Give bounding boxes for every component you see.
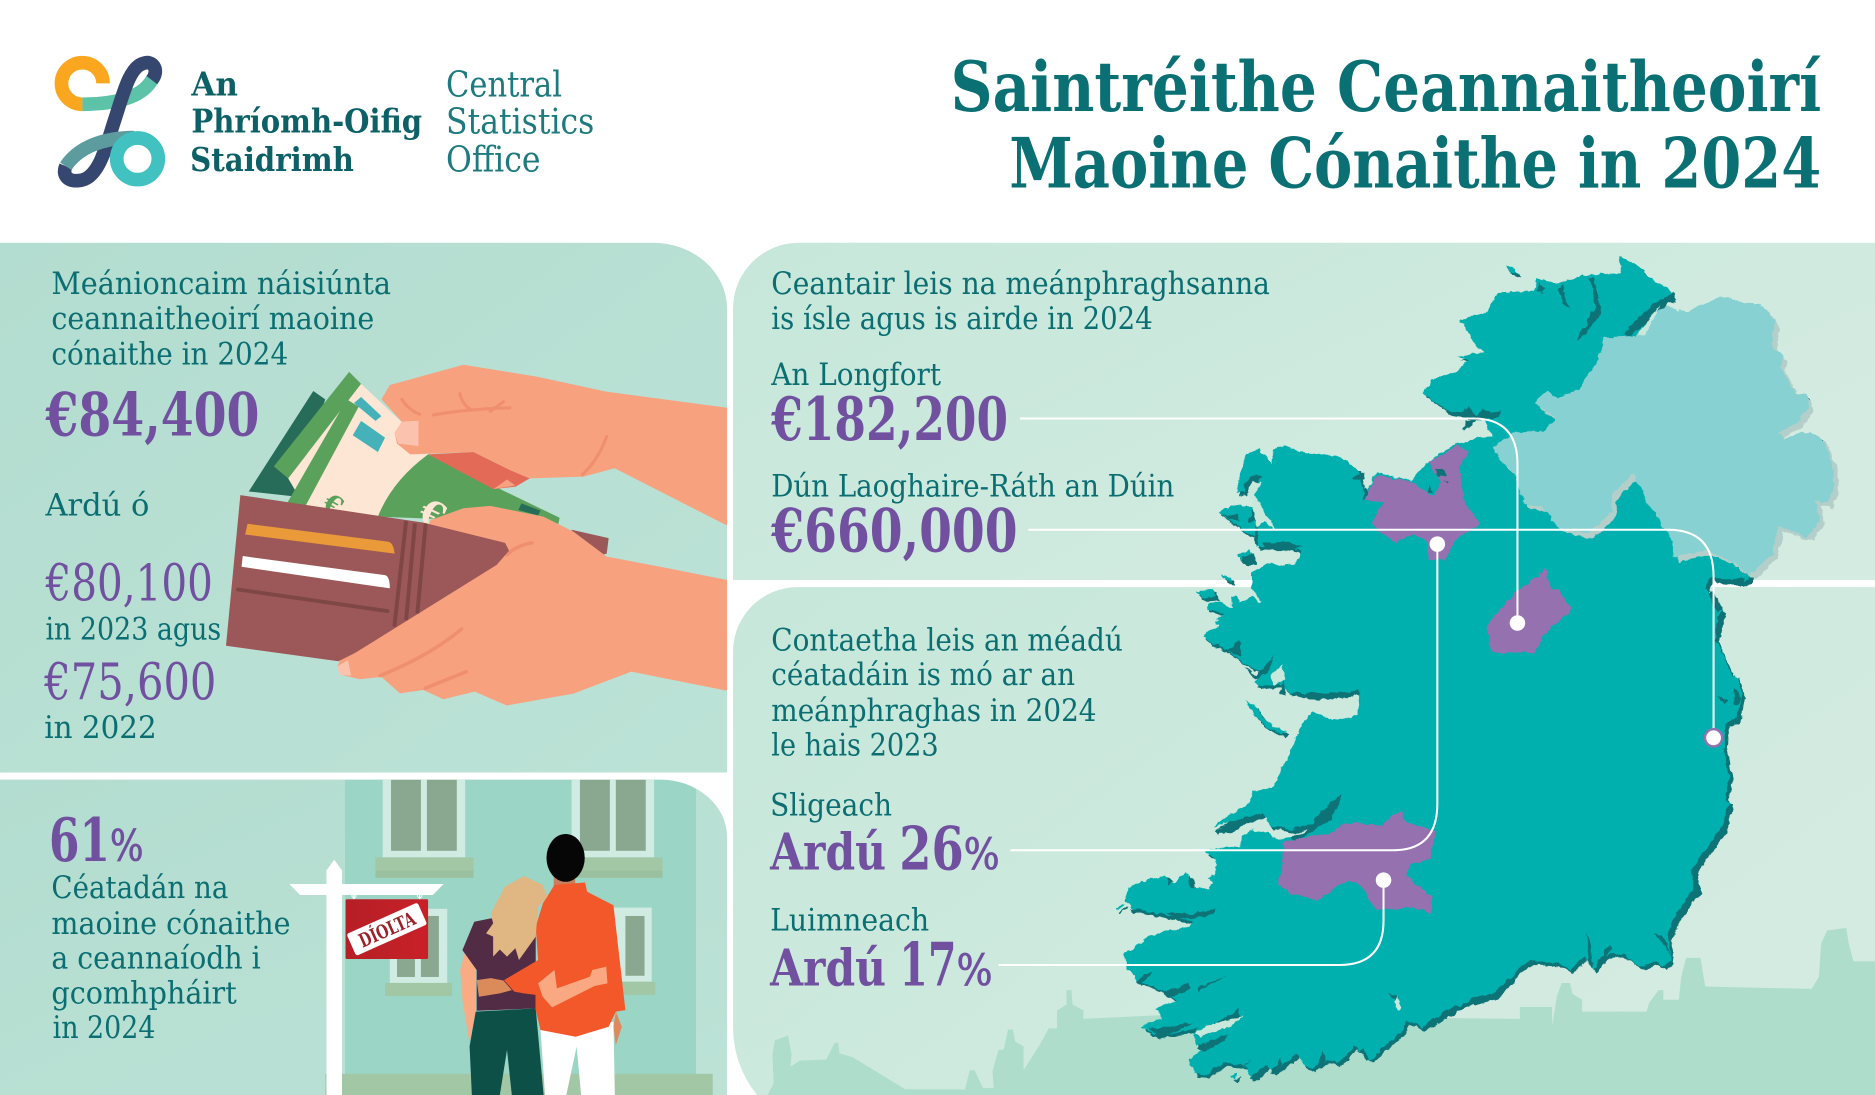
illustration: hands and wallet: € — [412, 490, 453, 539]
text: lowest and highest areas: €660,000 — [770, 496, 1018, 566]
logo text English: Office — [446, 140, 540, 181]
text: lowest and highest areas: Dún Laoghaire-Ráth an Dúin — [771, 468, 1174, 504]
text: largest percentage increases: Ardú — [769, 822, 886, 881]
logo — [61, 63, 158, 181]
text: lowest and highest areas: €182,200 — [771, 385, 1008, 455]
connector: Limerick — [998, 880, 1384, 965]
text: national income: €84,400 — [45, 380, 259, 450]
lower hand — [337, 506, 727, 706]
woman hair — [486, 876, 547, 960]
title — [951, 47, 1821, 205]
text: joint purchases: in 2024 — [53, 1010, 155, 1046]
coast: light inlets — [1195, 305, 1661, 1037]
panel: regional maps background — [733, 243, 1875, 1095]
wallet — [226, 495, 509, 661]
text: national income — [43, 266, 391, 746]
text: lowest and highest areas: Ceantair leis na meánphraghsanna — [771, 266, 1270, 302]
logo text Irish: Staidrimh — [190, 141, 354, 179]
text: largest percentage increases: céatadáin is mó ar an — [771, 657, 1075, 693]
Northern Ireland — [1492, 297, 1839, 580]
text: national income: in 2023 agus — [45, 612, 221, 648]
text: lowest and highest areas — [770, 266, 1270, 566]
text: largest percentage increases: Contaetha leis an méadú — [771, 623, 1123, 659]
text: joint purchases — [49, 806, 291, 1046]
logo text English — [446, 64, 594, 181]
logo text Irish: An — [190, 66, 238, 104]
county: Longford — [1486, 568, 1572, 653]
sign post — [289, 860, 444, 1095]
text: largest percentage increases: Sligeach — [770, 788, 892, 824]
man — [504, 834, 625, 1095]
text: largest percentage increases: 26 — [899, 814, 964, 884]
text: national income: €80,100 — [45, 553, 213, 612]
text: largest percentage increases: le hais 2023 — [771, 728, 939, 764]
text: largest percentage increases: % — [957, 946, 993, 996]
illustration: hands and wallet — [226, 365, 727, 706]
windows — [325, 780, 713, 1095]
panel: national income — [0, 243, 727, 772]
text: largest percentage increases: % — [964, 830, 1000, 880]
county: Sligo — [1366, 444, 1480, 560]
text: joint purchases: 61 — [49, 806, 110, 876]
map dots — [1376, 536, 1722, 888]
text: lowest and highest areas: An Longfort — [770, 357, 942, 393]
text: national income: in 2022 — [44, 710, 157, 746]
county: Limerick — [1278, 810, 1436, 914]
map: Ireland — [1116, 257, 1839, 1082]
logo text Irish — [190, 66, 422, 179]
logo text Irish: Phríomh-Oifig — [191, 103, 422, 141]
illustration: couple and house — [289, 780, 713, 1095]
logo text English: Central — [446, 64, 562, 105]
text: joint purchases: Céatadán na — [51, 870, 228, 906]
text: joint purchases: maoine cónaithe — [51, 906, 291, 942]
panel: joint purchases — [0, 780, 727, 1095]
Sligo bay — [1429, 469, 1448, 493]
coast: dark inlet shadows — [1130, 277, 1745, 1079]
skyline — [768, 928, 1875, 1095]
sold sign — [346, 894, 428, 959]
text: national income: ceannaitheoirí maoine — [51, 301, 374, 337]
text: national income: cónaithe in 2024 — [51, 337, 288, 373]
connector: Sligo — [1010, 544, 1437, 850]
text: largest percentage increases: meánphraghas in 2024 — [771, 693, 1097, 729]
illustration: hands and wallet: € — [317, 487, 349, 524]
text: largest percentage increases — [769, 623, 1123, 1000]
text: joint purchases: gcomhpháirt — [51, 975, 237, 1011]
text: national income: Meánioncaim náisiúnta — [51, 266, 391, 302]
text: largest percentage increases: 17 — [899, 930, 957, 1000]
text: national income: Ardú ó — [44, 487, 149, 523]
text: lowest and highest areas: is ísle agus is airde in 2024 — [771, 301, 1153, 337]
text: largest percentage increases: Ardú — [769, 938, 886, 997]
text: joint purchases: a ceannaíodh i — [51, 941, 261, 977]
upper hand — [428, 452, 530, 489]
woman — [460, 918, 544, 1095]
sold sign: DÍOLTA — [355, 907, 420, 952]
text: largest percentage increases: Luimneach — [770, 902, 929, 938]
text: national income: €75,600 — [43, 653, 216, 712]
connector: Dún Laoghaire-Ráth an Dúin — [1028, 530, 1714, 738]
text: joint purchases: % — [110, 822, 143, 872]
connector: Longford — [1020, 419, 1517, 623]
logo text English: Statistics — [446, 101, 594, 142]
